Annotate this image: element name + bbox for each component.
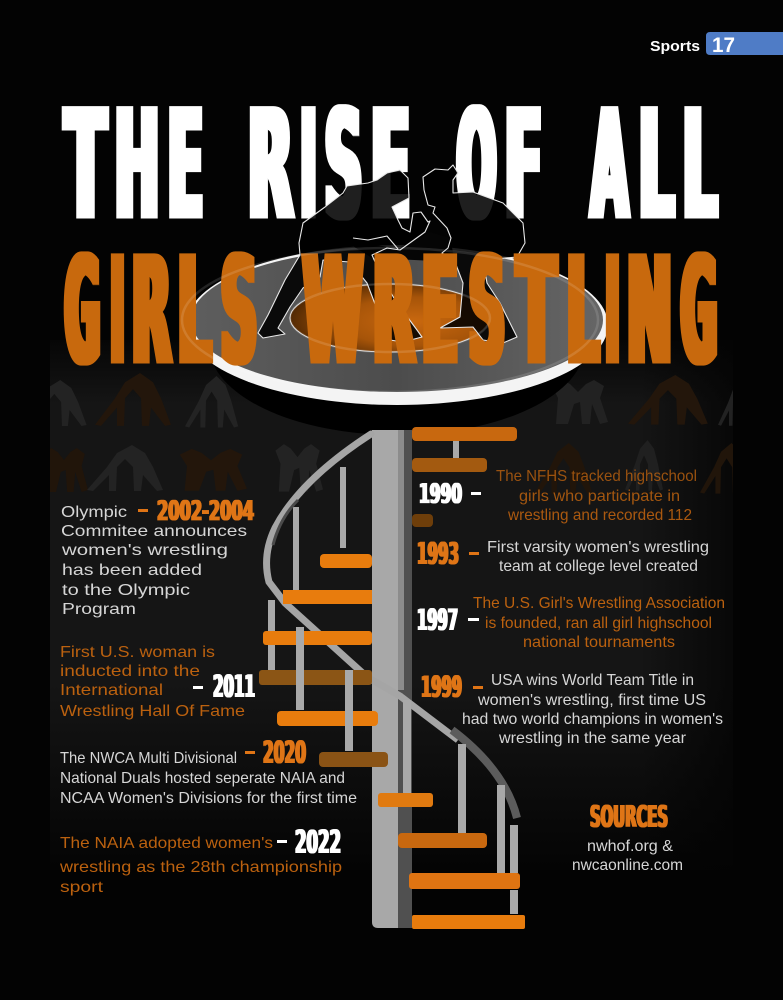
entry: 1990 [419,468,697,524]
upper handrail [267,434,400,696]
page number tab: 17 [712,34,735,57]
faded wrestler pattern [22,373,756,494]
entry: 1990: wrestling and recorded 112 [507,507,692,524]
balusters in front of steps [296,627,518,914]
balusters behind steps [268,441,459,670]
entry: 2002-2004: Program [62,601,136,618]
sources: nwhof.org & [587,838,673,855]
entry: 2022: wrestling as the 28th championship [59,859,342,876]
entry: 1997: 1997 [417,603,458,637]
entry: 2022 [59,823,342,896]
entry: 1993: 1993 [417,537,459,572]
entry: 1993: team at college level created [499,558,698,575]
text: L [683,79,717,253]
entry: 1997: is founded, ran all girl highschool [485,615,712,632]
lower handrail [400,696,517,818]
entry: 2011: International [60,682,163,699]
entry: 2011: inducted into the [60,663,200,680]
entry: 2022: 2022 [295,823,341,861]
header: section label and page number [650,32,783,57]
entry: 2002-2004: women's wrestling [61,542,228,559]
entry: 1993: First varsity women's wrestling [487,539,709,556]
title line 1: F [505,79,542,253]
right wrestler [423,165,525,343]
title line 1: T [65,79,106,253]
section label: Sports [650,38,700,55]
spiral staircase [259,427,525,929]
title line 2: L [178,226,211,397]
entry: 2011: Wrestling Hall Of Fame [60,703,245,720]
entry: 1997: national tournaments [523,634,675,651]
entry: 1997: The U.S. Girl's Wrestling Association [473,595,725,612]
arm outline [353,236,398,249]
entry: 1990: girls who participate in [519,488,680,505]
entry: 2002-2004: Olympic [61,504,127,521]
entry: 2002-2004: 2002-2004 [157,494,254,527]
title line 2: W [303,226,363,397]
entry: 1990: The NFHS tracked highschool [496,468,697,485]
entry: 1999: had two world champions in women's [462,711,723,728]
entry: 2020: The NWCA Multi Divisional [60,750,237,767]
wrestlers silhouette [258,165,525,343]
title line 1: I [301,79,316,253]
entry: 2022: sport [60,879,104,896]
entry: 1999: 1999 [421,670,462,704]
title line 2: S [469,226,505,397]
entry: 2020: NCAA Women's Divisions for the first time [60,790,357,807]
title line 2: L [567,226,599,397]
title line 1: R [248,79,293,253]
entry: 1999: women's wrestling, first time US [477,692,706,709]
title line 1: H [115,79,159,253]
title line 1: L [639,79,674,253]
title line 2: R [373,226,415,397]
entry: 2002-2004: has been added [62,562,202,579]
entry: 2002-2004 [61,494,254,618]
left wrestler [258,170,430,342]
title line 2: N [627,226,672,397]
black fill between the figures [340,232,455,262]
title line 2: E [422,226,458,397]
text: 2011 [213,669,255,705]
entry: 1999: USA wins World Team Title in [491,672,694,689]
title line 1: E [371,79,410,253]
title line 2: S [221,226,257,397]
entry: 1990: 1990 [419,477,462,510]
entry: 1999: wrestling in the same year [498,730,687,747]
sources: SOURCES [590,800,668,835]
entry: 2002-2004: Commitee announces [61,523,247,540]
entry: 2020: National Duals hosted seperate NAIA and [60,770,345,787]
entry: 2020 [60,735,357,807]
entry: 1993 [417,537,709,575]
translucent mat rings over title [182,248,598,392]
entry: 2002-2004: to the Olympic [62,582,190,599]
title line 2: I [111,226,124,397]
title line 1: S [325,79,362,253]
sources [572,800,683,874]
title line 2: G [65,226,100,397]
steps [259,427,525,929]
title line 2: T [517,226,556,397]
entry: 2011 [60,644,255,720]
entry: 2020: 2020 [263,735,306,771]
title line 1: E [168,79,203,253]
sources: nwcaonline.com [572,857,683,874]
entry: 2011: First U.S. woman is [60,644,215,661]
title line 1: A [591,79,628,253]
title line 1: O [457,79,496,253]
title line 2: I [606,226,619,397]
wrestling mat platform [186,245,608,435]
title line 2: R [132,226,171,397]
entry: 2022: The NAIA adopted women's [60,835,273,852]
entry: 1999 [421,670,723,747]
entry: 1997 [417,595,725,651]
central column [372,430,412,928]
